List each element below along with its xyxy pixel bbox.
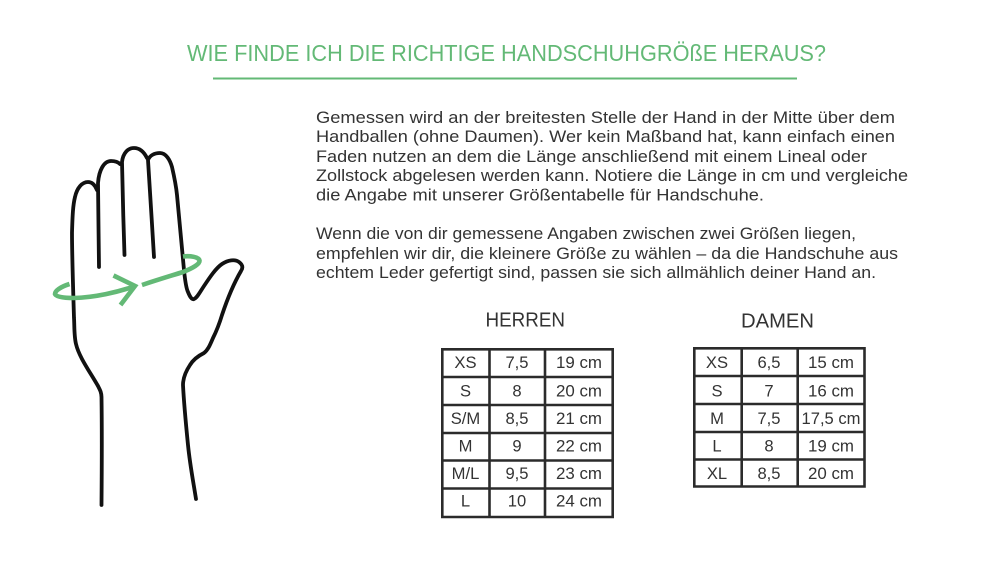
table values: Damen: 6,5 [757, 353, 781, 372]
heading: Herren: HERREN [486, 310, 565, 332]
table values: Damen: 16 cm [808, 382, 854, 400]
table values: Herren: 23 cm [556, 464, 602, 483]
table values: Damen [706, 353, 860, 483]
table values: Herren: 21 cm [556, 409, 602, 428]
table values: Damen: 20 cm [808, 464, 854, 483]
measuring band with arrow [55, 256, 200, 305]
table values: Damen: L [712, 436, 722, 456]
table values: Herren: S/M [451, 409, 480, 428]
table values: Damen: S [711, 382, 723, 400]
text block: size advice [316, 224, 898, 282]
table grid: Herren [442, 349, 613, 517]
table values: Herren: 8,5 [505, 409, 529, 428]
table values: Herren: XS [454, 353, 477, 372]
table values: Herren: S [460, 382, 471, 400]
icon: hand outline with measuring band [55, 148, 242, 505]
title underline [213, 78, 797, 80]
table grid: Damen [694, 348, 864, 486]
text block: measuring instructions: die Angabe mit unserer Größentabelle für Handschuhe. [316, 186, 764, 204]
hand outline [72, 148, 242, 505]
table values: Herren [451, 353, 602, 510]
table values: Damen: 7 [764, 382, 774, 400]
table values: Herren: 22 cm [556, 436, 602, 456]
panel: women's size table [694, 310, 864, 486]
table values: Damen: 17,5 cm [802, 409, 860, 428]
table values: Damen: M [710, 409, 724, 428]
panel: men's size table [442, 310, 613, 517]
text block: measuring instructions: Handballen (ohne Daumen). Wer kein Maßband hat, kann einfach einen [316, 127, 895, 146]
text block: measuring instructions [316, 108, 908, 204]
table values: Herren: 9 [512, 436, 522, 456]
table values: Herren: 20 cm [556, 382, 602, 400]
table values: Herren: 19 cm [556, 353, 602, 372]
text block: size advice: echtem Leder gefertigt sind, passen sie sich allmählich deiner Hand an. [316, 263, 876, 282]
text block: measuring instructions: Faden nutzen an dem die Länge anschließend mit einem Lineal oder [316, 147, 868, 166]
table values: Damen: 8 [764, 436, 774, 456]
table values: Herren: L [461, 492, 470, 510]
table values: Herren: 10 [508, 492, 526, 510]
table values: Damen: 19 cm [808, 436, 854, 456]
table values: Herren: M/L [452, 464, 479, 483]
table values: Damen: 8,5 [757, 464, 781, 483]
table values: Herren: 24 cm [556, 492, 602, 510]
text block: measuring instructions: Gemessen wird an der breitesten Stelle der Hand in der Mitte über dem [316, 108, 895, 127]
table values: Damen: XL [707, 464, 727, 483]
text block: size advice: Wenn die von dir gemessene Angaben zwischen zwei Größen liegen, [316, 224, 856, 243]
table values: Herren: 9,5 [505, 464, 529, 483]
table values: Damen: 7,5 [757, 409, 781, 428]
heading: Damen: DAMEN [741, 310, 814, 332]
table values: Damen: XS [706, 353, 728, 372]
text block: measuring instructions: Zollstock abgelesen werden kann. Notiere die Länge in cm und vergleiche [316, 166, 908, 185]
title: WIE FINDE ICH DIE RICHTIGE HANDSCHUHGRÖßE HERAUS? [187, 40, 826, 66]
table values: Herren: 7,5 [505, 353, 529, 372]
table values: Herren: M [459, 436, 472, 456]
table values: Herren: 8 [512, 382, 522, 400]
text block: size advice: empfehlen wir dir, die kleinere Größe zu wählen – da die Handschuhe aus [316, 244, 898, 263]
table values: Damen: 15 cm [808, 353, 854, 372]
